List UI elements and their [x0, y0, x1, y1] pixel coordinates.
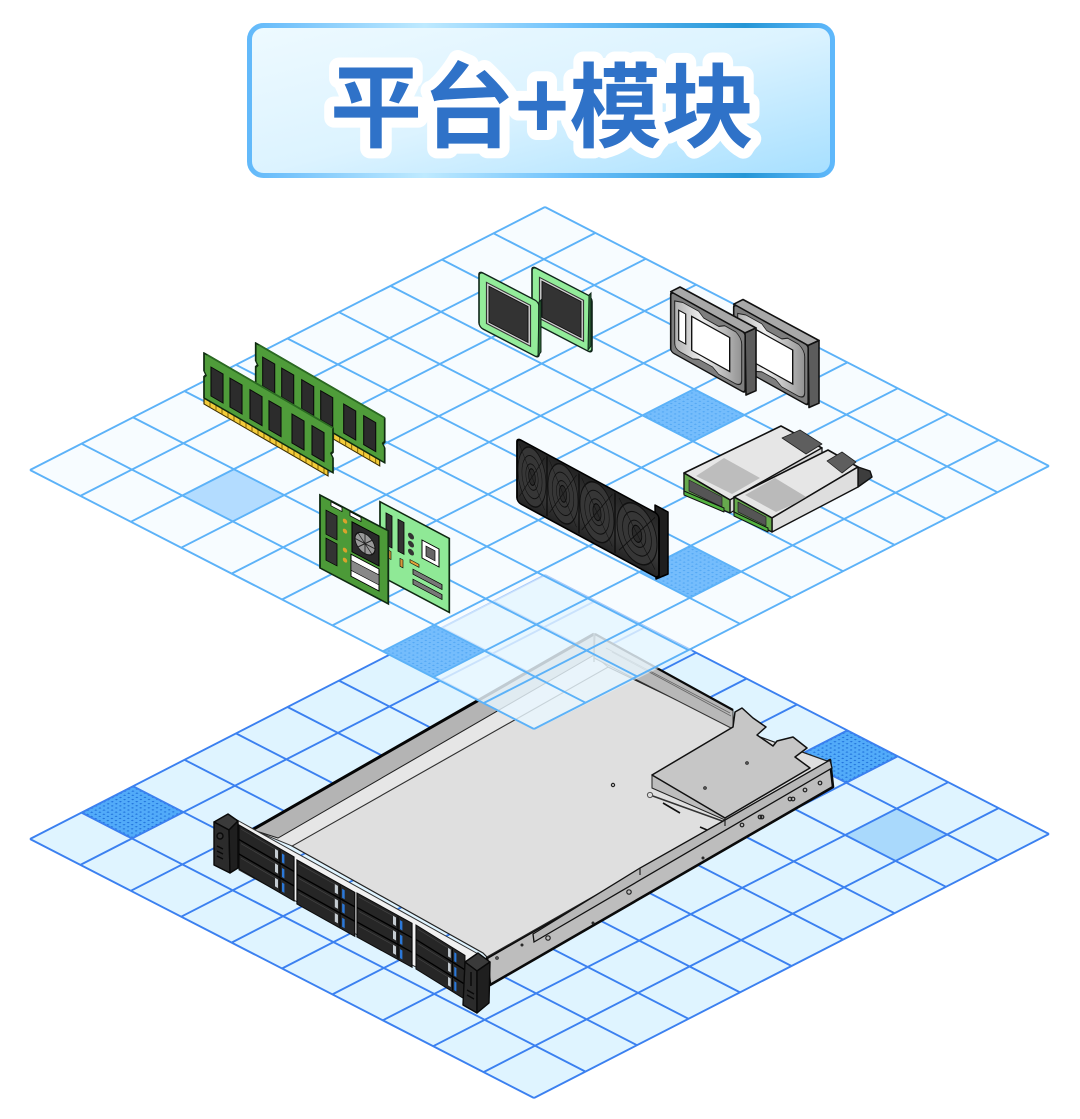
lower platform grid [30, 575, 1049, 1098]
title text: 平台+模块 [330, 34, 754, 167]
rear light green board [380, 502, 449, 612]
front dark green board [320, 495, 388, 604]
drive bay group 4 [416, 925, 465, 999]
icon: hard drives [671, 287, 819, 408]
left rail band [253, 634, 594, 838]
right rack ear [463, 953, 490, 1013]
title banner [250, 26, 832, 176]
chassis side wall [487, 760, 833, 985]
icon: fan module [517, 438, 668, 579]
icon: processors [479, 266, 592, 358]
server chassis [214, 634, 833, 1013]
screw holes [496, 762, 822, 959]
front strip [237, 820, 480, 1000]
icon: power supplies [684, 426, 872, 532]
drive bay group 2 [297, 860, 355, 936]
upper module grid [30, 207, 1049, 730]
chassis floor [292, 667, 830, 957]
left rack ear [214, 814, 238, 873]
icon: memory modules [204, 343, 385, 479]
drive bay group 1 [239, 825, 294, 901]
rear plate [652, 708, 810, 818]
left power supply [684, 426, 822, 513]
drive bay group 3 [357, 893, 412, 967]
right power supply [734, 450, 872, 532]
rear rail [594, 634, 733, 729]
plate underside [652, 775, 725, 820]
icon: mainboards [320, 495, 449, 612]
right rail flange [533, 760, 832, 942]
left rail strip [253, 655, 608, 846]
